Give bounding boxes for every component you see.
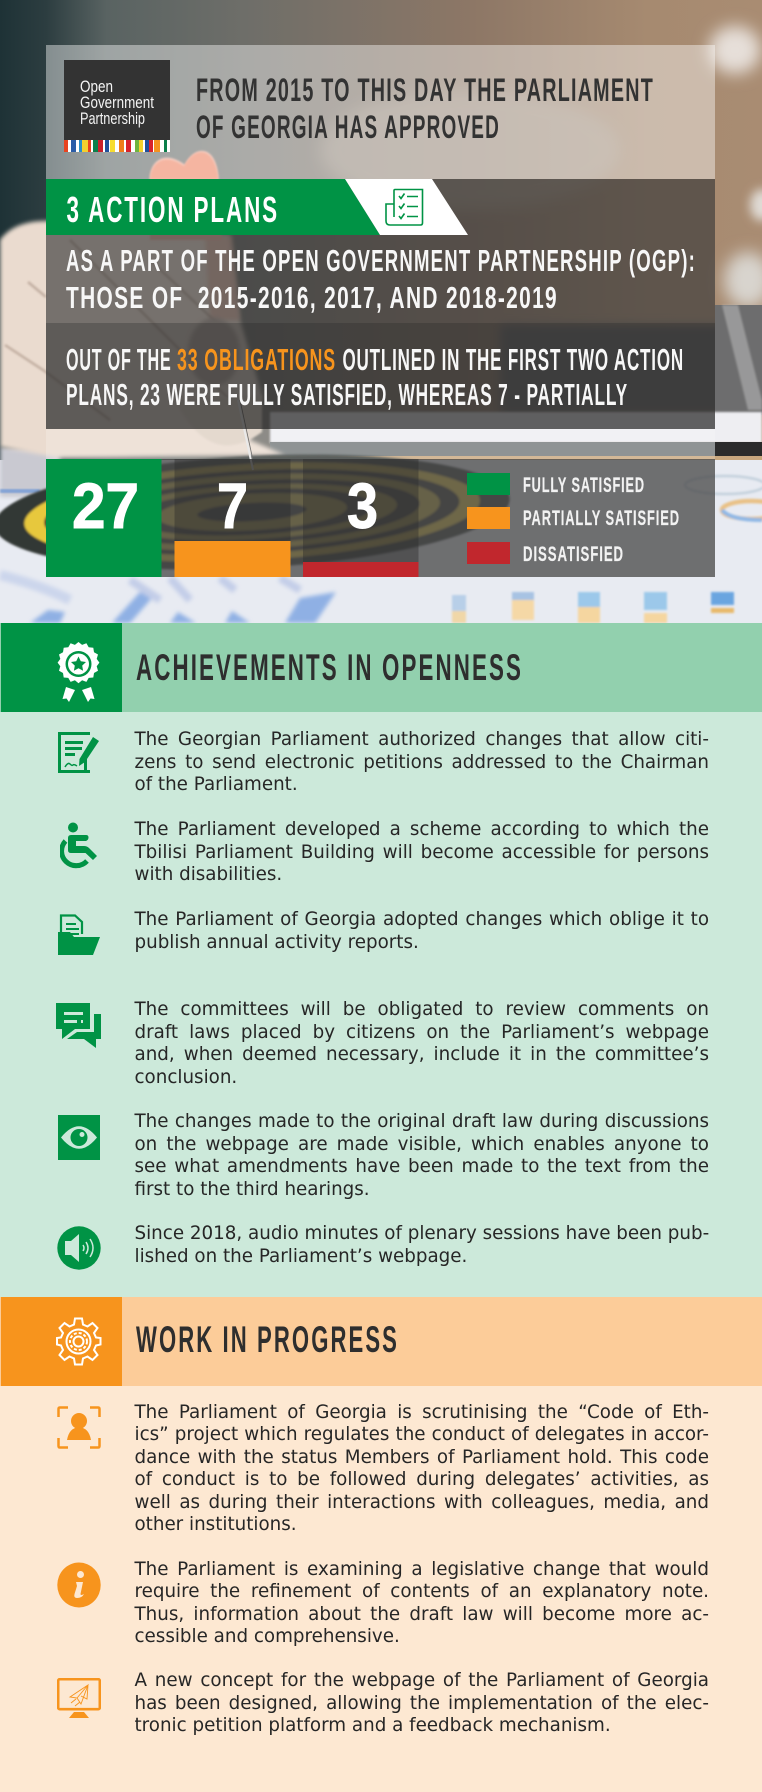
icon: checklist: [386, 190, 422, 225]
panel: header intro: [46, 45, 715, 179]
text: 33 obligations: OUT OF THE: [66, 342, 172, 377]
bar: 7 partially satisfied: 7: [217, 470, 248, 542]
icon: person in focus frame: [57, 1406, 101, 1449]
heading: from 2015 to this day: [196, 72, 654, 145]
icon: gear: [57, 1318, 100, 1364]
bar: 27 fully satisfied: 27: [72, 470, 139, 542]
text: with disabilities.: [134, 864, 282, 885]
text: 33 obligations: 33 OBLIGATIONS: [177, 342, 336, 377]
chart: obligations fulfilled bars: [46, 459, 680, 577]
item: electronic petitions: [58, 729, 709, 795]
text: The changes made to the original draft law during discussions: [134, 1111, 709, 1132]
text: cessible and comprehensive.: [134, 1626, 400, 1647]
background photo: desk with hand, dartboard, laptop and charts: [0, 0, 762, 623]
icon: information: [57, 1562, 101, 1608]
text: first to the third hearings.: [134, 1178, 370, 1200]
text: publish annual activity reports.: [134, 932, 419, 952]
item: visible amendments: [58, 1111, 709, 1200]
panel: statistics background: [46, 459, 715, 577]
text: [134, 819, 709, 885]
text: 33 obligations: [66, 342, 684, 412]
item: annual reports: [58, 909, 709, 955]
text: draft laws placed by citizens on the Parliament’s webpage: [134, 1022, 709, 1042]
text: [134, 909, 709, 952]
text: The committees will be obligated to review comments on: [134, 999, 709, 1020]
text: see what amendments have been made to the text from the: [134, 1156, 709, 1177]
pie charts on paper: [685, 476, 762, 520]
section header: work in progress: WORK IN PROGRESS: [136, 1319, 399, 1360]
icon: monitor with paper plane: [57, 1678, 101, 1718]
item: citizen comments: [56, 999, 709, 1088]
text: Tbilisi Parliament Building will become accessible for persons: [134, 842, 709, 862]
icon: award rosette: [58, 642, 99, 702]
legend: [467, 473, 680, 566]
text: [134, 729, 709, 795]
bar: 3 dissatisfied: [303, 459, 418, 577]
text: A new concept for the webpage of the Parliament of Georgia: [134, 1670, 709, 1691]
banner: 3 action plans with checklist icon: 3 ACTION PLANS: [66, 189, 279, 230]
text: other institutions.: [134, 1514, 297, 1535]
text: require the refinement of contents of an explanatory note.: [134, 1581, 709, 1602]
text: of the Parliament.: [134, 774, 298, 795]
bar: 27 fully satisfied: [46, 459, 162, 577]
text: part of the OGP: [66, 243, 696, 315]
hand: [0, 221, 285, 458]
needle: [238, 400, 253, 470]
text: The Georgian Parliament authorized changes that allow citi-: [134, 729, 709, 750]
panel: light strip above stats: [46, 429, 715, 459]
legend: DISSATISFIED: [523, 542, 624, 566]
text: ics” project which regulates the conduct of delegates in accor-: [134, 1424, 709, 1445]
text: [134, 1558, 709, 1647]
icon: wheelchair: [60, 822, 97, 868]
text: Since 2018, audio minutes of plenary sessions have been pub-: [134, 1223, 709, 1244]
text: conclusion.: [134, 1066, 237, 1088]
section header: work in progress: [0, 1297, 762, 1386]
item: new webpage concept: [57, 1670, 709, 1736]
laptop body: [270, 412, 762, 443]
text: [134, 1670, 709, 1736]
item: accessibility: [60, 819, 709, 885]
panel: obligations dark band: [46, 323, 715, 429]
text: [134, 1111, 709, 1200]
section header: achievements: [0, 623, 762, 712]
paper on desk: [0, 460, 762, 623]
item: code of ethics: [57, 1402, 709, 1535]
item: explanatory note: [57, 1558, 709, 1647]
panel: achievements in openness: [0, 623, 762, 1297]
dartboard: [0, 443, 513, 581]
text: tronic petition platform and a feedback mechanism.: [134, 1715, 611, 1736]
icon: signed document: [58, 732, 99, 773]
icon: folder with document: [58, 914, 100, 955]
icon: speaker: [57, 1226, 101, 1270]
text: The Parliament developed a scheme according to which the: [134, 819, 709, 840]
text: The Parliament of Georgia adopted changes which oblige it to: [134, 909, 709, 930]
heart: [150, 151, 222, 240]
icon: eye: [58, 1115, 100, 1160]
text: has been designed, allowing the implementation of the elec-: [134, 1692, 709, 1714]
heading: from 2015 to this day: OF GEORGIA HAS APPROVED: [196, 109, 500, 145]
text: of conduct is to be followed during delegates’ activities, as: [134, 1469, 709, 1490]
bar: 3 dissatisfied: 3: [347, 470, 378, 542]
banner: 3 action plans with checklist icon: [46, 179, 468, 235]
text: zens to send electronic petitions addressed to the Chairman: [134, 752, 709, 772]
text: The Parliament of Georgia is scrutinising the “Code of Eth-: [134, 1402, 709, 1422]
panel: work in progress: [0, 1297, 762, 1792]
heart top visible through the panel: [148, 152, 219, 179]
text: dance with the status Members of Parliament hold. This code: [134, 1446, 709, 1468]
text: on the webpage are made visible, which enables anyone to: [134, 1134, 709, 1154]
bar: 7 partially satisfied: [174, 459, 290, 577]
text: [134, 1223, 709, 1266]
text: well as during their interactions with colleagues, media, and: [134, 1492, 709, 1512]
text: Thus, information about the draft law will become more ac-: [134, 1604, 709, 1624]
panel: action plans dark band: [46, 179, 715, 323]
laptop keyboard: [500, 325, 762, 415]
blue charts: [0, 575, 336, 623]
logo: Open Government Partnership: Partnership: [80, 109, 145, 128]
text: and, when deemed necessary, include it in the committee’s: [134, 1044, 709, 1065]
text: [134, 1402, 709, 1535]
item: audio minutes: [57, 1223, 709, 1270]
icon: chat bubbles: [56, 1003, 101, 1048]
text: lished on the Parliament’s webpage.: [134, 1246, 467, 1266]
section header: achievements: ACHIEVEMENTS IN OPENNESS: [136, 647, 523, 688]
logo: Open Government Partnership: Open: [80, 77, 113, 96]
text: [134, 999, 709, 1088]
logo: Open Government Partnership: [64, 60, 170, 152]
text: The Parliament is examining a legislative change that would: [134, 1558, 709, 1580]
